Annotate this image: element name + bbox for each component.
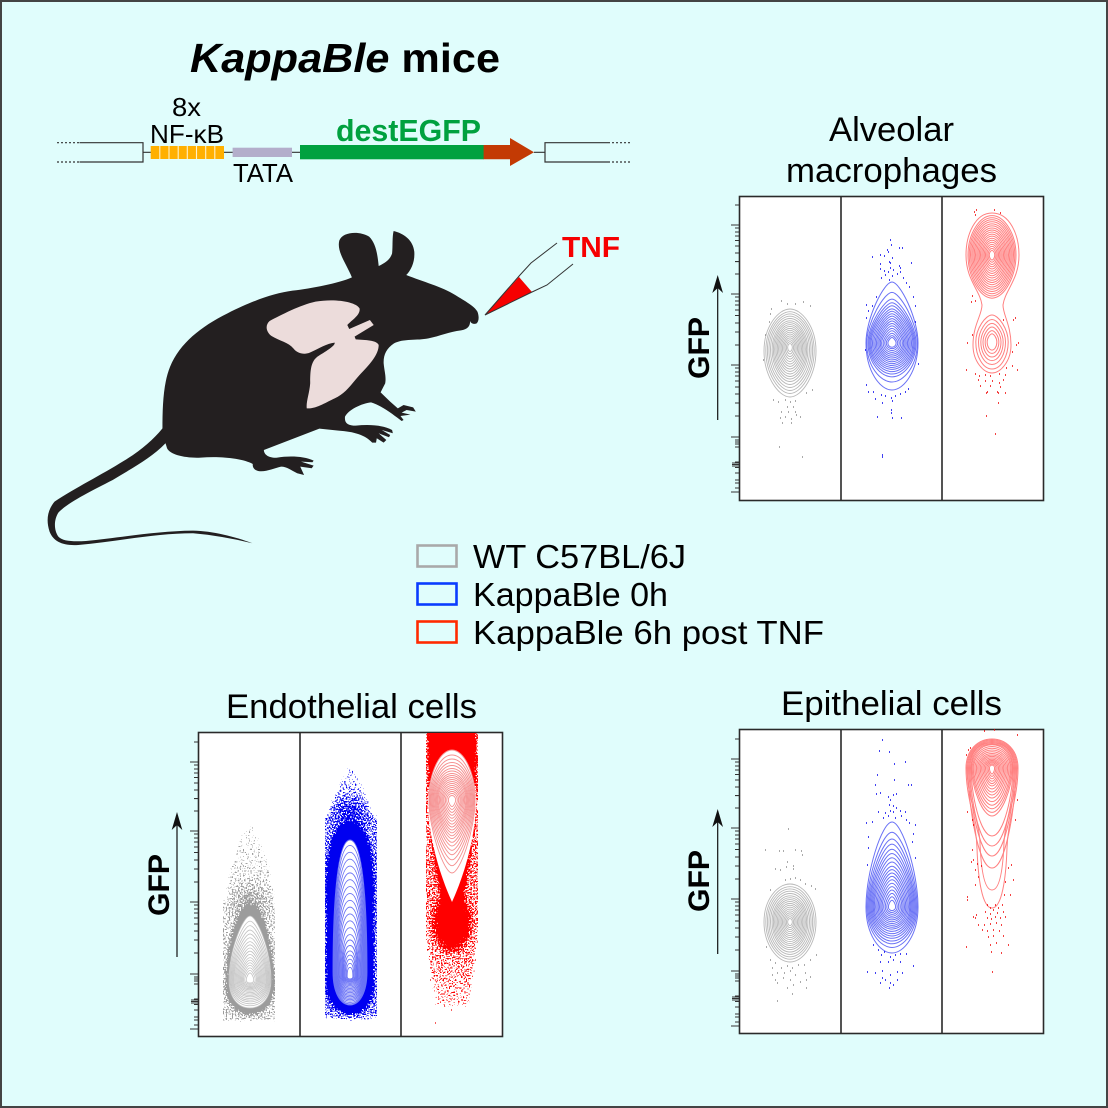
gray events xyxy=(765,829,817,1001)
red sparse events xyxy=(427,950,476,1023)
panel: endothelial cells flow plots xyxy=(143,725,502,1037)
right dotted ends xyxy=(608,143,630,162)
plot frame xyxy=(731,196,1044,500)
red events xyxy=(966,210,1019,434)
GFP axis: GFP xyxy=(143,854,176,916)
pipette with TNF xyxy=(485,232,620,315)
gray contours xyxy=(229,916,271,1008)
degradation arrow xyxy=(484,138,534,166)
GFP axis: GFP xyxy=(683,850,716,912)
TATA box xyxy=(233,148,292,157)
label: 8x: 8x xyxy=(172,92,201,122)
legend xyxy=(418,538,824,651)
panel: alveolar macrophages flow plots xyxy=(683,196,1044,500)
NF-kB binding sites xyxy=(151,146,224,159)
label: TATA: TATA xyxy=(233,158,294,188)
heading: alveolar macrophages: macrophages xyxy=(786,152,997,190)
left genomic flank xyxy=(80,143,151,162)
panel: epithelial cells flow plots xyxy=(683,729,1044,1034)
connector xyxy=(224,151,545,153)
heading: alveolar macrophages xyxy=(786,111,997,190)
blue contours xyxy=(866,282,918,390)
GFP axis xyxy=(143,812,182,957)
red contours xyxy=(429,750,475,873)
heading: alveolar macrophages: Alveolar xyxy=(829,111,954,149)
gene construct diagram xyxy=(57,92,630,188)
legend: KappaBle 0h: KappaBle 0h xyxy=(473,576,668,613)
gray contours xyxy=(764,884,816,962)
legend: WT: WT C57BL/6J xyxy=(473,538,686,575)
heading: endothelial cells: Endothelial cells xyxy=(226,688,477,726)
destEGFP bar xyxy=(300,145,484,159)
red events xyxy=(966,730,1018,972)
plot frame xyxy=(731,729,1044,1034)
heading: epithelial cells: Epithelial cells xyxy=(781,685,1002,723)
white core of red population xyxy=(428,750,476,902)
GFP axis: GFP xyxy=(683,317,716,379)
GFP axis xyxy=(683,809,723,954)
blue contours xyxy=(866,822,918,953)
legend: KappaBle 6h post TNF: KappaBle 6h post TNF xyxy=(473,614,824,651)
gray event cloud xyxy=(223,826,275,1022)
blue contours xyxy=(333,840,367,1005)
left dotted ends xyxy=(57,143,80,162)
TNF label: TNF xyxy=(562,232,620,264)
mouse illustration xyxy=(48,231,479,545)
pipette outline xyxy=(485,243,573,315)
right genomic flank xyxy=(545,143,608,162)
label: destEGFP: destEGFP xyxy=(336,113,481,148)
blue events xyxy=(865,240,919,457)
blue event cloud xyxy=(325,768,377,1021)
GFP axis xyxy=(683,275,723,420)
plot dividers xyxy=(300,732,401,1037)
plot frame xyxy=(190,732,502,1036)
lungs xyxy=(267,300,379,408)
title: KappaBle mice xyxy=(190,35,500,81)
mouse silhouette xyxy=(48,231,479,545)
blue events xyxy=(866,740,916,988)
pipette tip fill xyxy=(485,277,532,315)
red event cloud xyxy=(426,733,478,1006)
red contours xyxy=(966,213,1019,373)
gray contours xyxy=(764,309,816,397)
red contours xyxy=(966,739,1018,908)
gray events xyxy=(763,301,813,457)
label: NF-kB: NF-κB xyxy=(150,119,224,149)
